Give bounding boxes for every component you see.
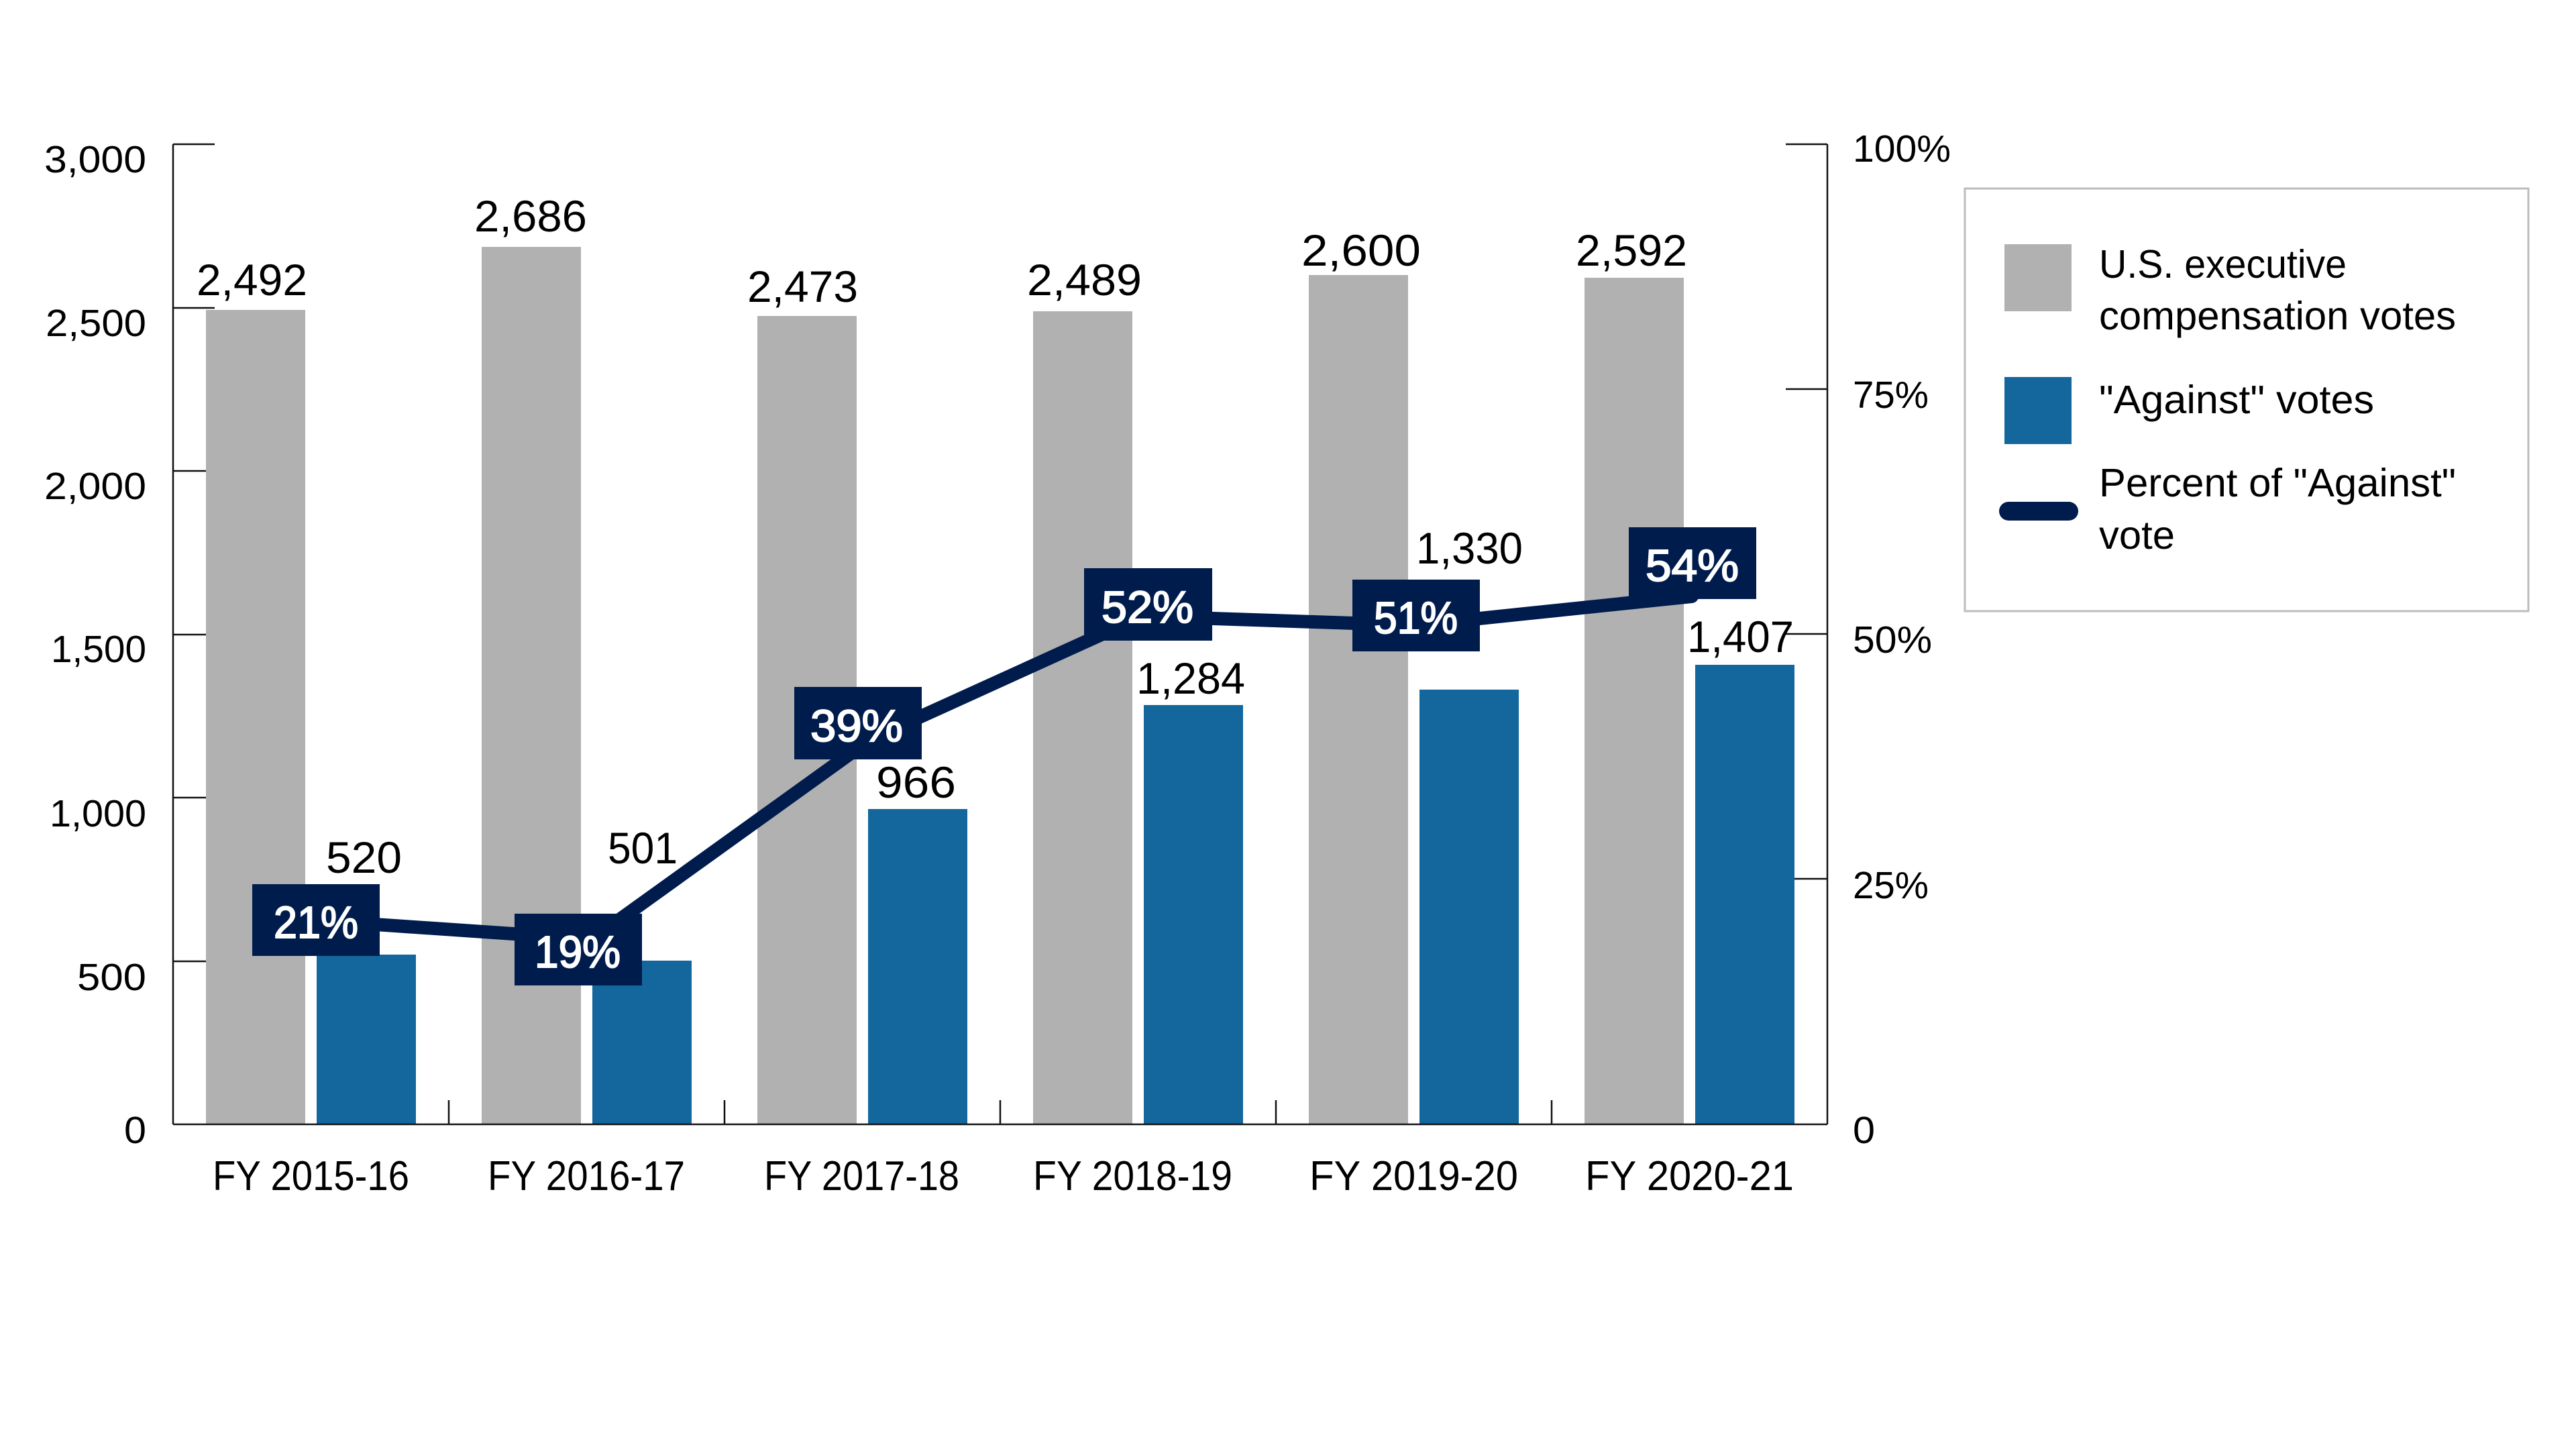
- percent label boxes: 19%: [535, 927, 621, 977]
- legend: compensation votes: [2099, 294, 2456, 338]
- bar value labels: 1,407: [1687, 612, 1794, 661]
- baseline and category ticks: [173, 1100, 1827, 1124]
- category labels: FY 2020-21: [1585, 1153, 1794, 1199]
- bar value labels: 520: [326, 833, 402, 882]
- legend: U.S. executive: [2099, 242, 2347, 286]
- left axis labels: 0: [124, 1109, 146, 1152]
- grey bars: U.S. executive compensation votes: [206, 247, 1684, 1124]
- category labels: FY 2018-19: [1033, 1153, 1232, 1199]
- category labels: FY 2019-20: [1309, 1153, 1518, 1199]
- left axis labels: [44, 138, 146, 1152]
- bar value labels: 2,473: [747, 262, 858, 311]
- right axis labels: 75%: [1853, 374, 1929, 417]
- line: percent of against vote: [316, 596, 1692, 939]
- category labels: FY 2017-18: [764, 1153, 959, 1199]
- left axis labels: 1,000: [50, 792, 146, 835]
- right axis labels: 25%: [1853, 864, 1929, 907]
- percent label boxes: 39%: [810, 701, 903, 751]
- percent label boxes: 21%: [274, 898, 358, 948]
- blue bars: against votes: [317, 665, 1794, 1124]
- legend: vote: [2099, 513, 2175, 557]
- bar value labels: 2,492: [197, 255, 307, 305]
- bar value labels: 1,330: [1416, 523, 1523, 573]
- left axis with ticks: [173, 144, 215, 1124]
- bar value labels: 2,686: [474, 191, 587, 241]
- right axis labels: 0: [1853, 1109, 1875, 1152]
- bar value labels: 2,592: [1576, 225, 1687, 275]
- right axis with ticks: [1786, 144, 1827, 1124]
- right axis labels: 100%: [1853, 127, 1951, 170]
- bar value labels: 2,600: [1301, 225, 1421, 275]
- category labels: [213, 1153, 1794, 1199]
- left axis labels: 500: [77, 956, 146, 999]
- legend: Percent of "Against": [2099, 461, 2456, 505]
- percent label boxes: 54%: [1646, 541, 1739, 591]
- bar value labels: 966: [876, 757, 956, 807]
- bar value labels: [197, 191, 1794, 882]
- right axis labels: [1853, 127, 1951, 1152]
- bar value labels: 1,284: [1136, 653, 1245, 703]
- left axis labels: 3,000: [44, 138, 146, 181]
- legend: "Against" votes: [2099, 378, 2374, 422]
- percent label boxes: 51%: [1374, 593, 1458, 643]
- bar value labels: 501: [608, 823, 678, 873]
- percent label boxes: [252, 527, 1756, 985]
- category labels: FY 2016-17: [488, 1153, 685, 1199]
- legend: [1965, 189, 2528, 611]
- right axis labels: 50%: [1853, 619, 1932, 661]
- left axis labels: 2,000: [44, 465, 146, 508]
- left axis labels: 2,500: [46, 302, 146, 345]
- category labels: FY 2015-16: [213, 1153, 409, 1199]
- percent label boxes: 52%: [1102, 582, 1193, 633]
- left axis labels: 1,500: [51, 628, 146, 671]
- bar value labels: 2,489: [1027, 255, 1142, 305]
